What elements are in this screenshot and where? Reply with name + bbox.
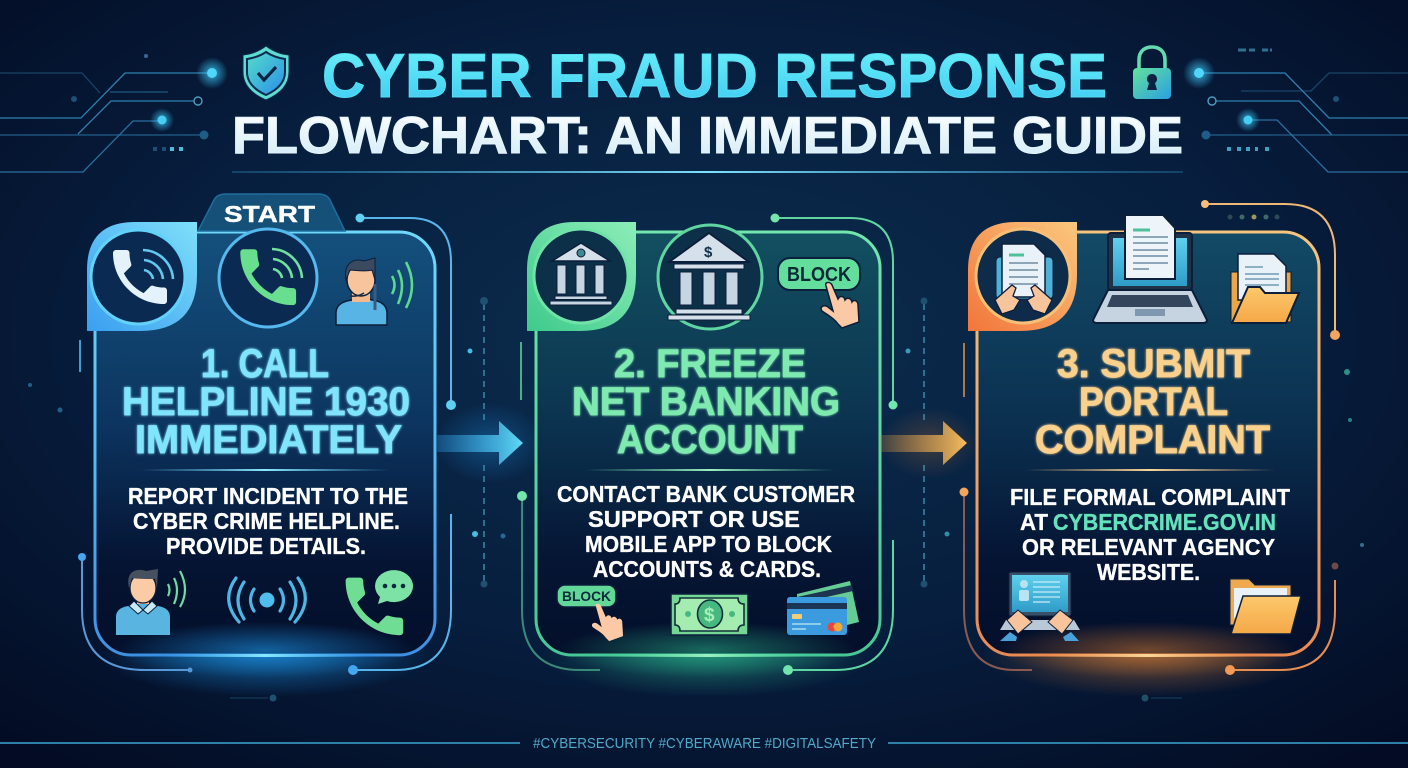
step 2 heading (572, 342, 840, 462)
arrow: step 1 to step 2 (435, 403, 545, 483)
step 1 card frame (95, 232, 435, 655)
step 3 bottom glow (982, 613, 1312, 697)
step 1 body text: PROVIDE DETAILS. (166, 533, 366, 559)
step 3 body text: WEBSITE. (1097, 559, 1200, 585)
step 2 edge highlight (607, 654, 807, 657)
circuit decoration left (0, 54, 228, 172)
step 2 card frame (536, 232, 880, 655)
step 2 heading: 2. FREEZE (614, 342, 806, 386)
step 1 start tab (198, 194, 345, 231)
title underline (232, 171, 1183, 173)
step 1 body text: CYBER CRIME HELPLINE. (133, 508, 400, 534)
step 2 divider (585, 469, 835, 471)
panel: step 1 call helpline (78, 194, 456, 697)
icon: laptop with document (1093, 215, 1207, 323)
panel: step 2 freeze banking (517, 214, 898, 697)
step 1 body text (128, 483, 408, 559)
step 3 heading (1035, 342, 1270, 462)
step 2 body text: CONTACT BANK CUSTOMER (557, 481, 855, 507)
icon: small block button with hand: BLOCK (562, 588, 611, 604)
footer left rule (0, 742, 520, 744)
icon: phone with chat bubble (346, 570, 413, 635)
step 3 body text: CYBERCRIME.GOV.IN (1053, 509, 1276, 535)
step 2 body text: MOBILE APP TO BLOCK (585, 531, 832, 557)
footer hashtags: #CYBERSECURITY #CYBERAWARE #DIGITALSAFETY (533, 736, 876, 752)
title line 2: FLOWCHART: AN IMMEDIATE GUIDE (232, 107, 1183, 165)
icon: padlock (1133, 47, 1171, 99)
step 3 corner tab (968, 222, 1077, 331)
icon: signal waves (229, 578, 305, 622)
step 3 inner glow (997, 622, 1297, 678)
step 1 divider (140, 469, 390, 471)
step 3 heading: COMPLAINT (1035, 418, 1270, 462)
step 2 heading: ACCOUNT (617, 418, 803, 462)
icon: open folder (1230, 579, 1301, 634)
step 3 heading: 3. SUBMIT (1057, 342, 1250, 386)
step 2 corner tab (527, 222, 636, 331)
icon: shield (243, 46, 289, 100)
step 1 heading (122, 342, 410, 462)
icon: block button with hand (778, 258, 860, 328)
icon: banknote (671, 594, 748, 635)
icon: person speaking (116, 569, 185, 635)
icon: folder with document (1231, 254, 1299, 323)
step 1 heading: HELPLINE 1930 (122, 380, 410, 424)
icon: block button with hand: BLOCK (787, 264, 851, 286)
step 2 body text: ACCOUNTS & CARDS. (593, 556, 821, 582)
step 3 heading: PORTAL (1079, 380, 1228, 424)
step 1 bottom glow (100, 613, 430, 697)
step 2 outer circuit traces (517, 214, 898, 675)
arrow: step 2 to step 3 (880, 407, 980, 479)
step 3 body text: OR RELEVANT AGENCY (1022, 534, 1275, 560)
step 1 heading: IMMEDIATELY (135, 418, 402, 462)
title line 1: CYBER FRAUD RESPONSE (322, 42, 1107, 111)
step 1 inner glow (115, 622, 415, 678)
step 1 outer circuit traces (78, 214, 456, 675)
icon: credit cards (787, 581, 859, 635)
step 2 bottom glow (542, 613, 872, 697)
icon: typing on laptop (1000, 572, 1080, 641)
icon: support agent (336, 258, 412, 325)
connector decoration between cards (28, 297, 1364, 702)
step 1 heading: 1. CALL (201, 342, 329, 386)
circuit decoration right (1183, 50, 1408, 172)
step 2 inner glow (557, 622, 857, 678)
icon: banknote: $ (704, 605, 715, 626)
step 2 heading: NET BANKING (572, 380, 840, 424)
step 3 body text (1010, 484, 1290, 585)
step 1 body text: REPORT INCIDENT TO THE (128, 483, 408, 509)
step 3 card frame (977, 232, 1319, 655)
step 2 body text (557, 481, 855, 582)
step 3 body text: FILE FORMAL COMPLAINT (1010, 484, 1290, 510)
icon: large bank (658, 225, 762, 329)
step 1 corner tab (87, 222, 197, 331)
icon: small block button with hand (557, 585, 623, 641)
icon: green phone circle (219, 229, 317, 327)
step 2 body text: SUPPORT OR USE (588, 506, 800, 532)
panel: step 3 submit complaint (960, 200, 1340, 697)
footer right rule (888, 742, 1408, 744)
step 3 body text: AT (1020, 509, 1048, 535)
step 3 edge highlight (1047, 654, 1247, 657)
step 1 start tab: START (224, 201, 315, 227)
step 3 divider (1025, 469, 1275, 471)
step 3 outer circuit traces (960, 200, 1340, 675)
step 1 edge highlight (165, 654, 365, 657)
icon: large bank: $ (704, 244, 713, 261)
